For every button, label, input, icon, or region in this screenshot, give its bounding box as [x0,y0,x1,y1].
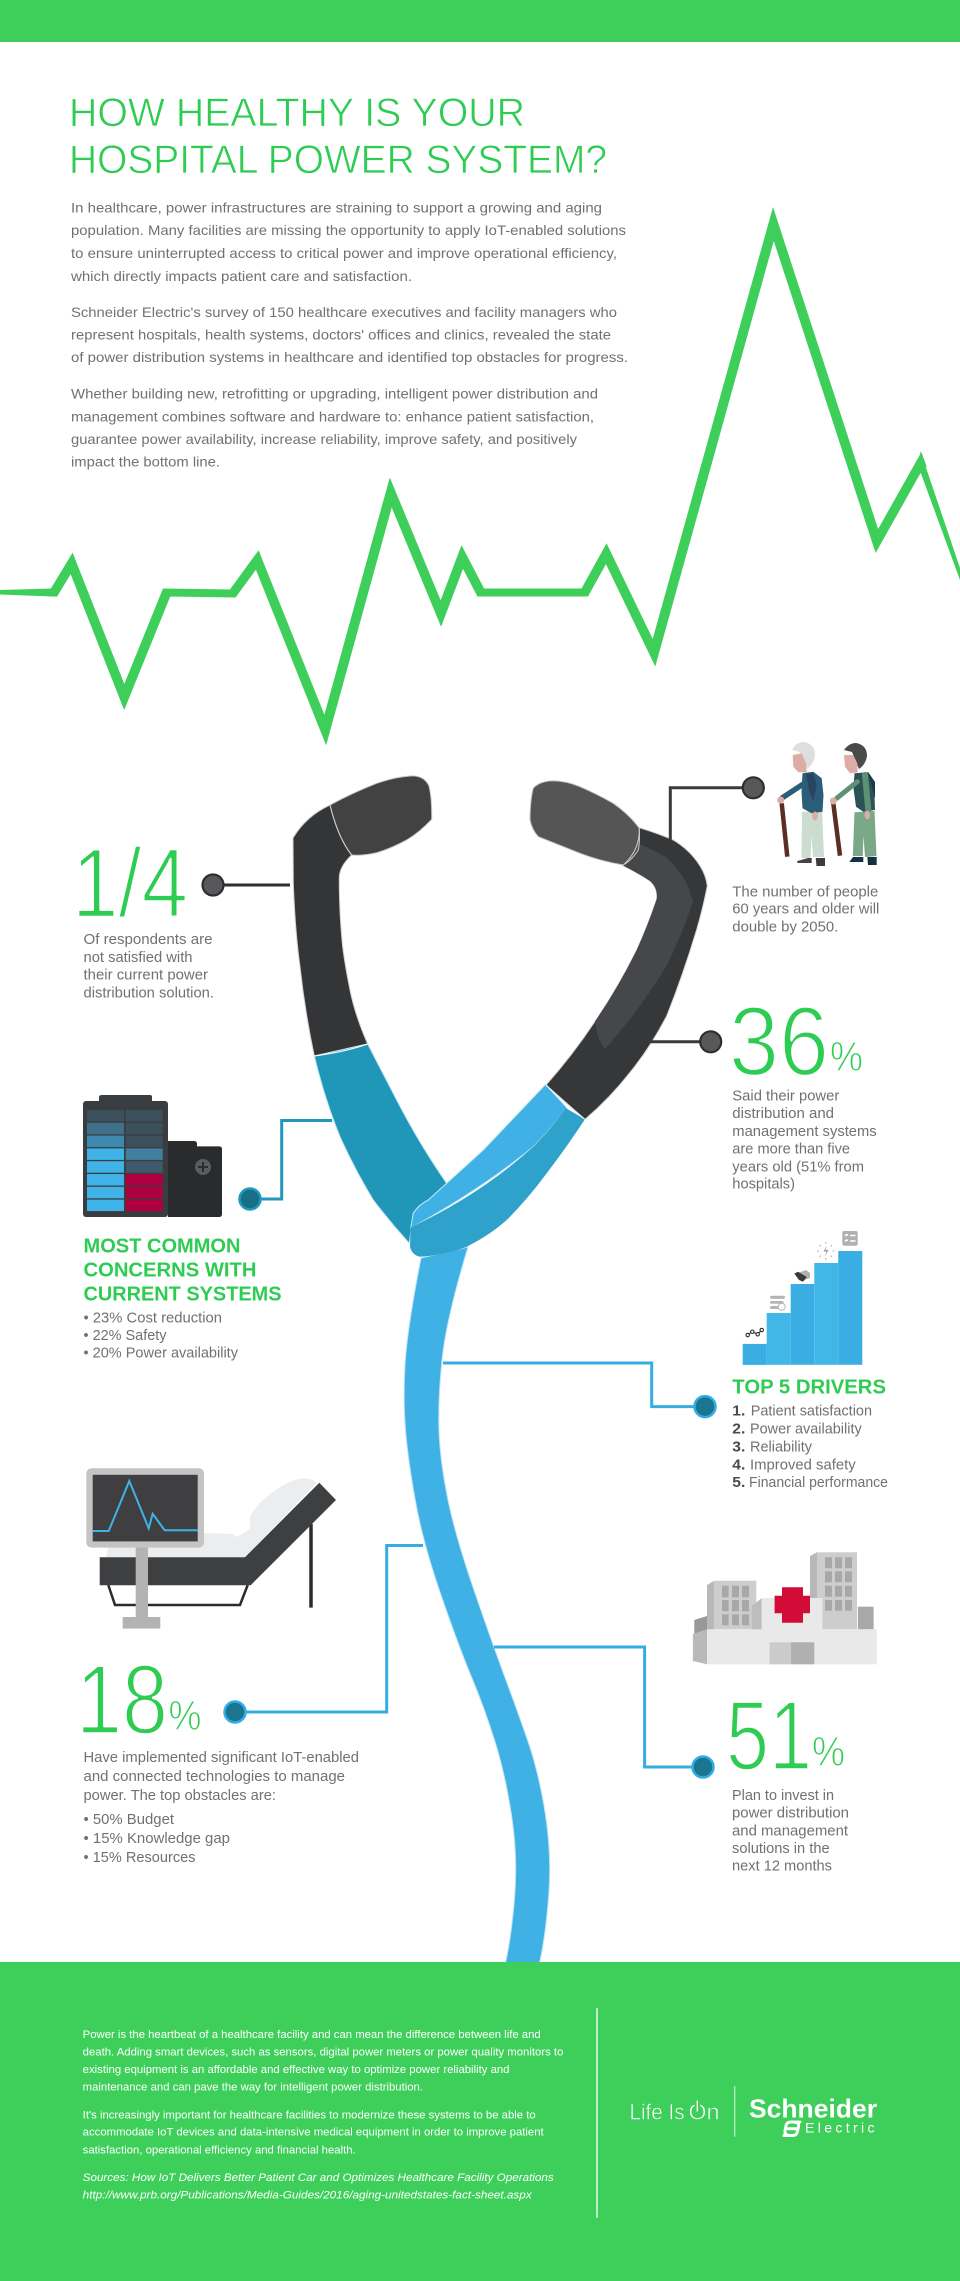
left arm [293,805,368,1056]
drivers heading and list: 3. [732,1439,745,1455]
stat: 36 percent: distribution and [732,1106,834,1122]
tube [404,1247,550,1965]
footer text: accommodate IoT devices and data-intensive medical equipment in order to improve patient [83,2127,544,2139]
logo: Schneider Electric: Schneider [749,2094,877,2124]
stat: 51 percent: Plan to invest in [732,1788,834,1804]
stat: 18 percent: • 50% Budget [84,1812,174,1828]
stat: 36 percent: are more than five [732,1142,850,1158]
footer band [0,1962,960,2281]
person one [777,742,825,866]
logo: Life Is On [630,2099,720,2124]
intro text: guarantee power availability, increase reliability, improve safety, and positively [71,431,577,447]
stat: 18 percent: • 15% Resources [84,1850,196,1866]
stat: 36 percent: years old (51% from [732,1159,864,1175]
icon: lightning [817,1242,834,1260]
title: HOW HEALTHY IS YOUR [69,91,525,135]
stat: 36 percent: Said their power [732,1088,839,1104]
stat: 51 percent [726,1680,849,1875]
stat: 18 percent: % [168,1692,202,1739]
footer text: death. Adding smart devices, such as sensors, digital power meters or power quality monitors to [83,2047,563,2059]
intro text: represent hospitals, health systems, doctors' offices and clinics, revealed the state [71,326,611,342]
logo: Schneider Electric [749,2094,877,2136]
people text: double by 2050. [732,920,838,936]
people text: The number of people [732,884,878,900]
stat: one quarter: distribution solution. [84,985,214,1001]
footer text: http://www.prb.org/Publications/Media-Guides/2016/aging-unitedstates-fact-sheet.aspx [83,2190,532,2202]
concerns heading and list: MOST COMMON [84,1236,240,1258]
drivers heading and list: Financial performance [749,1475,888,1491]
left tower [694,1616,707,1634]
stat: one quarter [72,828,214,1001]
intro text: impact the bottom line. [71,454,220,470]
bed frame [108,1585,248,1605]
monitor [86,1468,204,1548]
left ear tip [330,776,432,855]
stat: 51 percent: 51 [726,1680,812,1790]
intro text [70,200,628,470]
intro text: population. Many facilities are missing the opportunity to apply IoT-enabled solutions [71,222,626,238]
right ear tip [530,781,640,865]
intro text: which directly impacts patient care and satisfaction. [70,268,412,284]
intro text: to ensure uninterrupted access to critical power and improve operational efficiency, [71,245,617,261]
connector: 18 percent [224,1546,423,1722]
icon: trend [746,1328,763,1337]
right blue section [411,1084,567,1228]
drivers heading and list: Patient satisfaction [751,1404,872,1420]
stat: 18 percent: • 15% Knowledge gap [84,1831,230,1847]
person two [830,743,877,865]
connector: one quarter [202,874,290,896]
icon: elderly people [777,742,877,866]
stat: 51 percent: next 12 months [732,1859,832,1875]
footer text: maintenance and can pave the way for intelligent power distribution. [83,2082,423,2094]
top green band [0,0,960,42]
stat: 51 percent: and management [732,1823,848,1839]
stat: one quarter: Of respondents are [84,932,212,948]
stat: 36 percent: 36 [729,986,829,1096]
stat: one quarter: not satisfied with [84,950,192,966]
stat: 51 percent: % [812,1728,845,1775]
drivers heading and list: 1. [732,1404,745,1420]
stat: one quarter: 1/4 [72,828,188,938]
connector: people [670,777,764,841]
stat: 36 percent: hospitals) [732,1177,795,1193]
icon: hospital [693,1552,877,1664]
drivers heading and list: Reliability [750,1439,813,1455]
title: HOSPITAL POWER SYSTEM? [69,138,607,182]
drivers heading and list [732,1376,888,1491]
connector: 36 percent [648,1031,721,1052]
footer text: existing equipment is an affordable and effective way to optimize power reliability and [83,2064,509,2076]
heartbeat line [0,224,960,730]
logo: Schneider Electric: Electric [805,2120,874,2136]
concerns heading and list: • 22% Safety [84,1328,167,1344]
stat: 18 percent: and connected technologies to manage [84,1769,345,1785]
icon: settings card [842,1231,858,1246]
stat: 18 percent [76,1644,359,1866]
concerns heading and list [84,1236,282,1362]
right tower [810,1552,817,1630]
footer text: Sources: How IoT Delivers Better Patient Car and Optimizes Healthcare Facility Operations [83,2172,554,2184]
icon: rising steps [743,1231,862,1365]
stat: 18 percent: power. The top obstacles are: [84,1788,276,1804]
icon: hospital bed and monitor [86,1468,336,1629]
footer text: satisfaction, operational efficiency and financial health. [83,2144,356,2156]
logo: Life Is On: O [688,2099,706,2124]
icon: handshake [794,1270,810,1282]
drivers heading and list: 4. [732,1457,745,1473]
logo: Life Is On: n [706,2099,720,2124]
right blue shade [410,1108,585,1257]
stat: 18 percent: 18 [76,1644,168,1754]
logo: Life Is On: Life Is [630,2099,684,2124]
footer text: It's increasingly important for healthcare facilities to modernize these systems to be able to [83,2109,536,2121]
drivers heading and list: 2. [732,1422,745,1438]
bedding [106,1478,317,1557]
monitor stand [136,1547,148,1618]
drivers heading and list: Power availability [750,1422,862,1438]
stat: 51 percent: power distribution [732,1806,849,1822]
stat: 18 percent: Have implemented significant IoT-enabled [84,1750,359,1766]
drivers heading and list: Improved safety [750,1457,856,1473]
connector: concerns [240,1120,332,1210]
right arm [546,828,707,1119]
connector: drivers [443,1363,716,1417]
connector: 51 percent [494,1647,714,1778]
people text: 60 years and older will [732,902,879,918]
base [693,1629,707,1664]
icon: checklist [770,1296,785,1310]
right arm highlight [595,843,693,1049]
intro text: Schneider Electric's survey of 150 healthcare executives and facility managers who [71,304,617,320]
drivers heading and list: TOP 5 DRIVERS [732,1376,886,1398]
stat: 36 percent: % [830,1033,863,1080]
intro text: management combines software and hardware to: enhance patient satisfaction, [71,408,594,424]
footer text [83,2029,563,2202]
stethoscope [293,776,707,1965]
stat: 51 percent: solutions in the [732,1841,830,1857]
stat: one quarter: their current power [84,968,208,984]
intro text: Whether building new, retrofitting or upgrading, intelligent power distribution and [71,386,598,402]
concerns heading and list: CONCERNS WITH [84,1259,256,1281]
drivers heading and list: 5. [732,1475,745,1491]
intro text: of power distribution systems in healthcare and identified top obstacles for progress. [71,349,628,365]
title [69,91,607,182]
concerns heading and list: • 23% Cost reduction [84,1310,222,1326]
footer text: Power is the heartbeat of a healthcare facility and can mean the difference between life and [83,2029,541,2041]
concerns heading and list: • 20% Power availability [84,1346,239,1362]
concerns heading and list: CURRENT SYSTEMS [84,1283,282,1305]
stat: 36 percent [729,986,877,1193]
centre block [752,1598,762,1630]
stat: 36 percent: management systems [732,1124,877,1140]
icon: batteries [83,1095,222,1217]
red cross [775,1587,810,1623]
intro text: In healthcare, power infrastructures are straining to support a growing and aging [71,200,602,216]
people text [732,884,879,936]
left blue section [314,1044,447,1243]
